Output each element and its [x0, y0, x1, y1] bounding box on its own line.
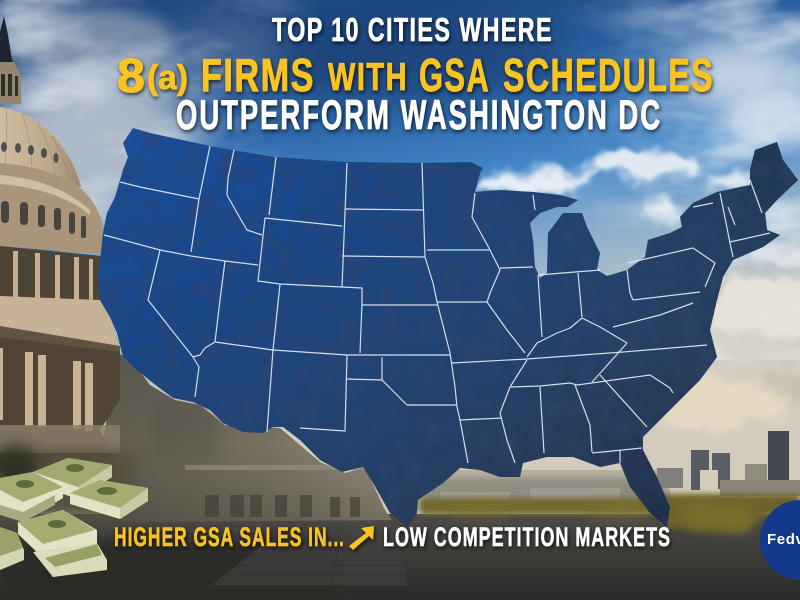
capitol dome [0, 107, 81, 190]
tree line [420, 494, 800, 533]
capitol drum [0, 163, 102, 254]
title line 2 highlighted [117, 49, 714, 103]
title line 2 highlighted: (a) [147, 59, 188, 97]
logo badge [760, 500, 800, 580]
bottom tagline [114, 522, 671, 552]
icon: rising arrow [349, 526, 374, 550]
title line 2 highlighted: SCHEDULES [503, 49, 714, 101]
bill stack left [0, 472, 63, 522]
capitol colonnade [0, 246, 102, 300]
capitol statue and lantern [0, 16, 21, 104]
title [117, 11, 714, 138]
bill stack front [18, 510, 97, 558]
map of the contiguous United States [90, 120, 800, 532]
stacks of dollar bills [0, 458, 148, 577]
title line 2 highlighted: WITH [328, 56, 408, 99]
bill stack back [33, 458, 112, 499]
US Capitol building [0, 16, 135, 520]
title line 2 highlighted: 8 [117, 50, 145, 103]
stone pavement [212, 540, 408, 585]
bill stack low left [0, 527, 24, 570]
state borders [104, 146, 770, 463]
title line 2 highlighted: FIRMS [201, 49, 315, 101]
capitol portico [0, 298, 120, 470]
bill stack right [70, 480, 148, 519]
title line 1: TOP 10 CITIES WHERE [272, 11, 553, 48]
river water and dark ground [0, 514, 800, 600]
bill stack bottom [33, 543, 107, 577]
faded government building under the map [100, 350, 392, 522]
tagline yellow text: HIGHER GSA SALES IN... [114, 522, 345, 552]
title line 2 highlighted: GSA [419, 49, 490, 101]
distant city skyline [400, 431, 800, 510]
